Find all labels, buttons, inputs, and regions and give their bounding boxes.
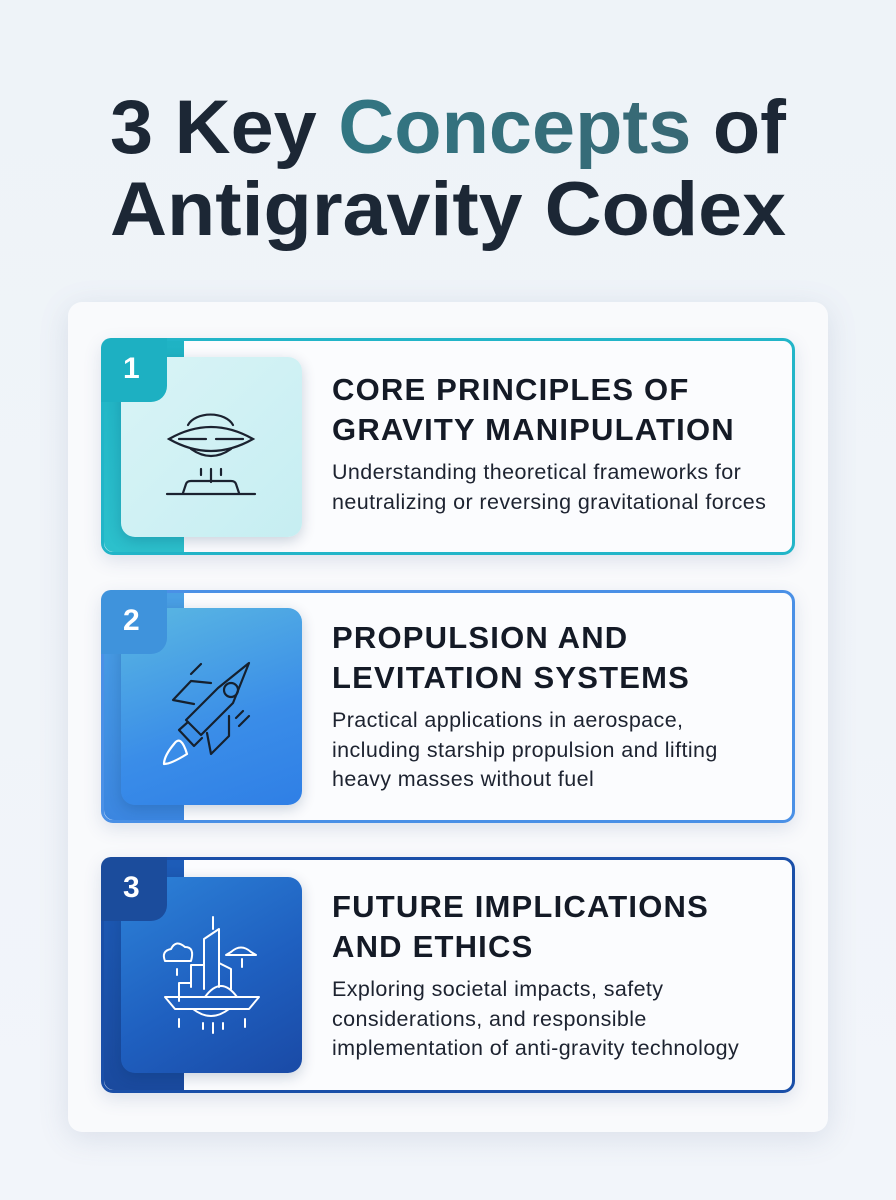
text 1: GRAVITY MANIPULATION <box>332 412 735 447</box>
title: Antigravity Codex <box>110 167 786 252</box>
text 2 <box>332 620 718 791</box>
accent strip 3 <box>104 860 184 1090</box>
text 1: Understanding theoretical frameworks for <box>332 460 741 484</box>
text 2: Practical applications in aerospace, <box>332 708 683 732</box>
text 3 <box>332 889 739 1060</box>
title <box>110 85 787 252</box>
badge 3 <box>101 857 167 921</box>
icon tile: rocket <box>121 608 302 805</box>
badge 2: 2 <box>123 604 140 637</box>
panel: container <box>68 302 828 1132</box>
text 1: neutralizing or reversing gravitational forces <box>332 490 766 514</box>
text 3: AND ETHICS <box>332 929 533 964</box>
text 2: PROPULSION AND <box>332 620 628 655</box>
title: 3 Key Concepts of <box>110 85 787 170</box>
card 1 <box>101 338 795 555</box>
badge 3: 3 <box>123 871 140 904</box>
card 2 <box>101 590 795 823</box>
badge 2 <box>101 590 167 654</box>
text 2: LEVITATION SYSTEMS <box>332 660 690 695</box>
text 3: considerations, and responsible <box>332 1006 647 1030</box>
text 1 <box>332 372 766 514</box>
icon tile: floating city <box>121 877 302 1073</box>
accent strip 2 <box>104 593 184 820</box>
text 3: Exploring societal impacts, safety <box>332 977 663 1001</box>
text 3: FUTURE IMPLICATIONS <box>332 889 709 924</box>
text 2: heavy masses without fuel <box>332 767 594 791</box>
text 1: CORE PRINCIPLES OF <box>332 372 689 407</box>
icon tile: UFO <box>121 357 302 537</box>
badge 1: 1 <box>123 352 140 385</box>
card 3 <box>101 857 795 1093</box>
text 3: implementation of anti-gravity technology <box>332 1036 739 1060</box>
accent strip 1 <box>104 341 184 552</box>
badge 1 <box>101 338 167 402</box>
text 2: including starship propulsion and lifting <box>332 738 718 762</box>
